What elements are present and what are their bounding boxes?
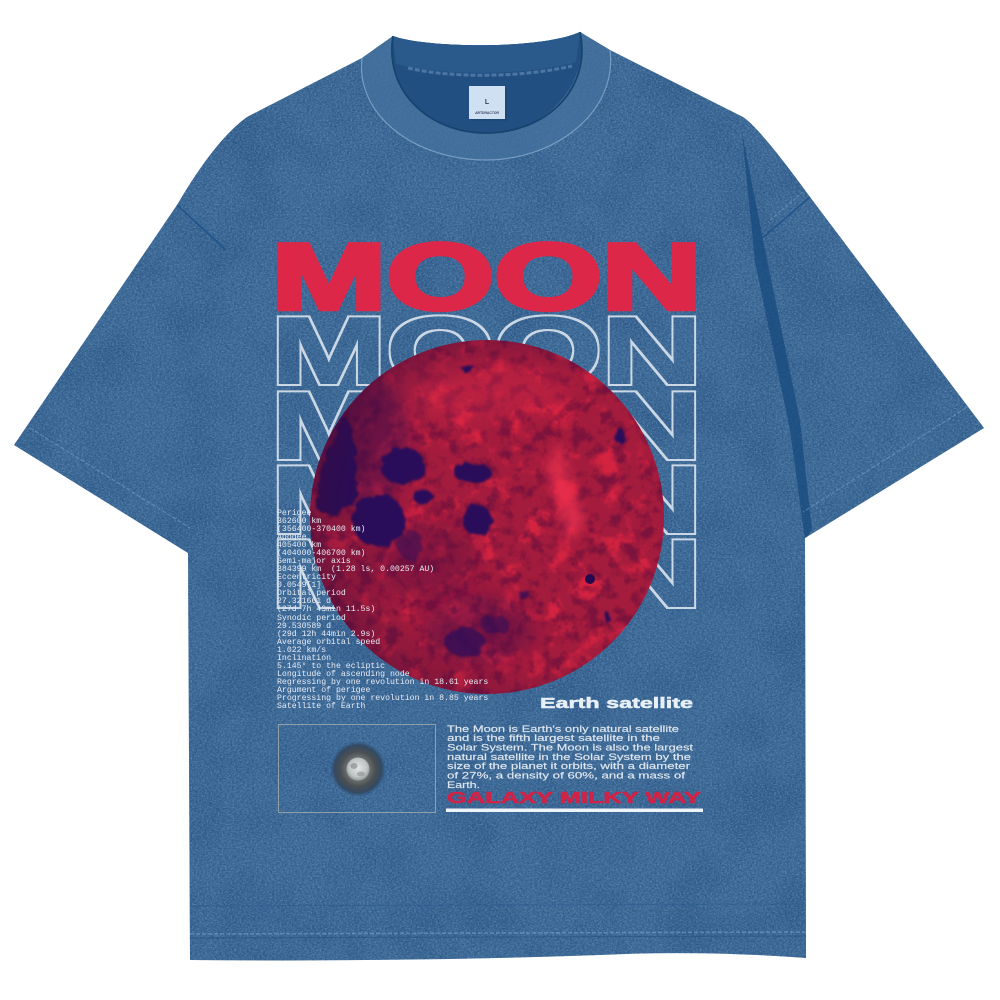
text block: orbital data: Synodic period	[277, 613, 346, 623]
text block: orbital data: Satellite of Earth	[277, 701, 366, 711]
text block: orbital data: Regressing by one revolution in 18.61 years	[277, 677, 488, 687]
panel: collar	[361, 32, 611, 160]
heading: GALAXY MILKY WAY: GALAXY MILKY WAY	[447, 790, 702, 807]
text block: orbital data: (29d 12h 44min 2.9s)	[277, 629, 375, 639]
text block: orbital data: Apogee	[277, 533, 307, 542]
text block: orbital data: Average orbital speed	[277, 637, 380, 647]
text block: description: The Moon is Earth's only natural satellite	[447, 724, 679, 734]
icon: neck label	[469, 86, 507, 121]
divider: white rule	[446, 808, 703, 812]
text block: orbital data: Perigee	[277, 508, 311, 518]
title: MOON: MOON	[271, 224, 702, 329]
text block: orbital data: (356400-370400 km)	[277, 524, 365, 534]
text block: orbital data: Argument of perigee	[277, 685, 370, 695]
outlined repeated MOON rows: MOON	[271, 298, 702, 403]
text block: orbital data: 405400 km	[277, 540, 321, 550]
text block: orbital data	[277, 508, 488, 711]
text block: description: size of the planet it orbits, with a diameter	[447, 761, 690, 771]
text block: description: Solar System. The Moon is also the largest	[447, 742, 694, 752]
icon: neck label: L	[485, 99, 490, 106]
text block: orbital data: 362600 km	[277, 516, 321, 526]
icon: neck label: ARTDRACTOR	[475, 111, 499, 115]
text block: orbital data: Eccentricity	[277, 572, 336, 582]
text block: description: and is the fifth largest satellite in the	[447, 733, 660, 743]
text block: orbital data: 1.022 km/s	[277, 645, 326, 655]
text block: orbital data: 29.530589 d	[277, 621, 331, 631]
text block: orbital data: Progressing by one revolution in 8.85 years	[277, 693, 488, 703]
text block: orbital data: Semi-major axis	[277, 556, 351, 566]
text block: orbital data: (27d 7h 43min 11.5s)	[277, 604, 375, 614]
text block: description: Earth.	[447, 780, 480, 790]
illustration: red moon	[310, 340, 664, 694]
text block: orbital data: Orbital period	[277, 588, 346, 598]
outlined repeated MOON rows: MOON	[271, 521, 702, 626]
text block: orbital data: 0.0549[1]	[277, 580, 321, 590]
text block: orbital data: (404000-406700 km)	[277, 548, 365, 558]
text block: orbital data: Inclination	[277, 653, 331, 663]
heading: Earth satellite: Earth satellite	[540, 695, 693, 712]
outlined repeated MOON rows: MOON	[271, 447, 702, 552]
neck interior	[392, 32, 581, 134]
text block: description	[447, 724, 694, 790]
text block: description: of 27%, a density of 60%, and a mass of	[447, 770, 686, 780]
panel: framed small moon photo	[278, 724, 436, 812]
text block: orbital data: 384399 km (1.28 ls, 0.00257 AU)	[277, 564, 434, 574]
rib band	[361, 32, 611, 160]
text block: description: natural satellite in the Solar System by the	[447, 752, 691, 762]
text block: orbital data: 5.145° to the ecliptic	[277, 661, 385, 671]
text block: orbital data: Longitude of ascending node	[277, 669, 410, 679]
text block: orbital data: 27.321661 d	[277, 596, 331, 606]
outlined repeated MOON rows: MOON	[271, 373, 702, 478]
outlined repeated MOON rows	[271, 298, 702, 626]
